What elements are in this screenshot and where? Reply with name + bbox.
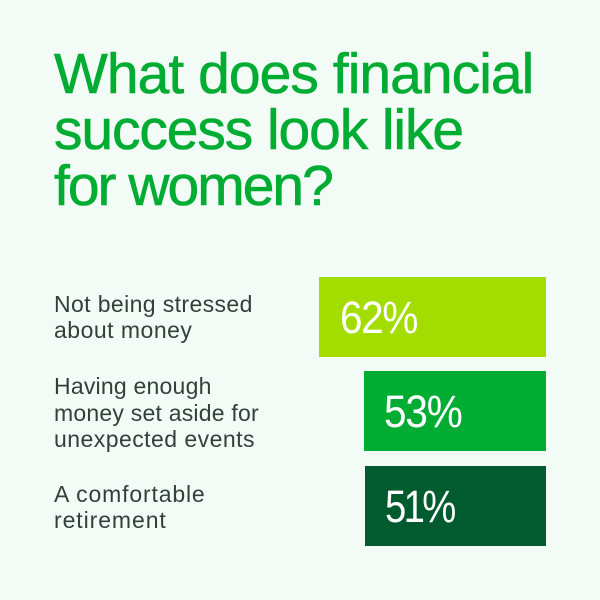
title: for women? — [54, 154, 332, 218]
bar: 62% — [319, 277, 546, 357]
label: unexpected events: money set aside for — [54, 400, 259, 426]
title — [54, 42, 533, 218]
label: not being stressed — [54, 290, 253, 343]
chart: financial success measures — [54, 277, 546, 546]
label: comfortable retirement: A comfortable — [54, 480, 206, 506]
bar: 62%: 62% — [340, 292, 417, 343]
label: not being stressed: Not being stressed — [54, 290, 253, 316]
label: comfortable retirement — [54, 480, 206, 533]
bar: 51%: 51% — [385, 481, 454, 532]
title: success look like — [54, 98, 463, 162]
label: comfortable retirement: retirement — [54, 507, 167, 533]
bar: 53% — [364, 371, 546, 451]
label: unexpected events — [54, 373, 259, 452]
title: What does financial — [54, 42, 533, 106]
label: unexpected events: unexpected events — [54, 426, 255, 452]
label: not being stressed: about money — [54, 317, 192, 343]
bar: 51% — [365, 466, 546, 546]
label: unexpected events: Having enough — [54, 373, 212, 399]
bar: 53%: 53% — [384, 386, 462, 437]
